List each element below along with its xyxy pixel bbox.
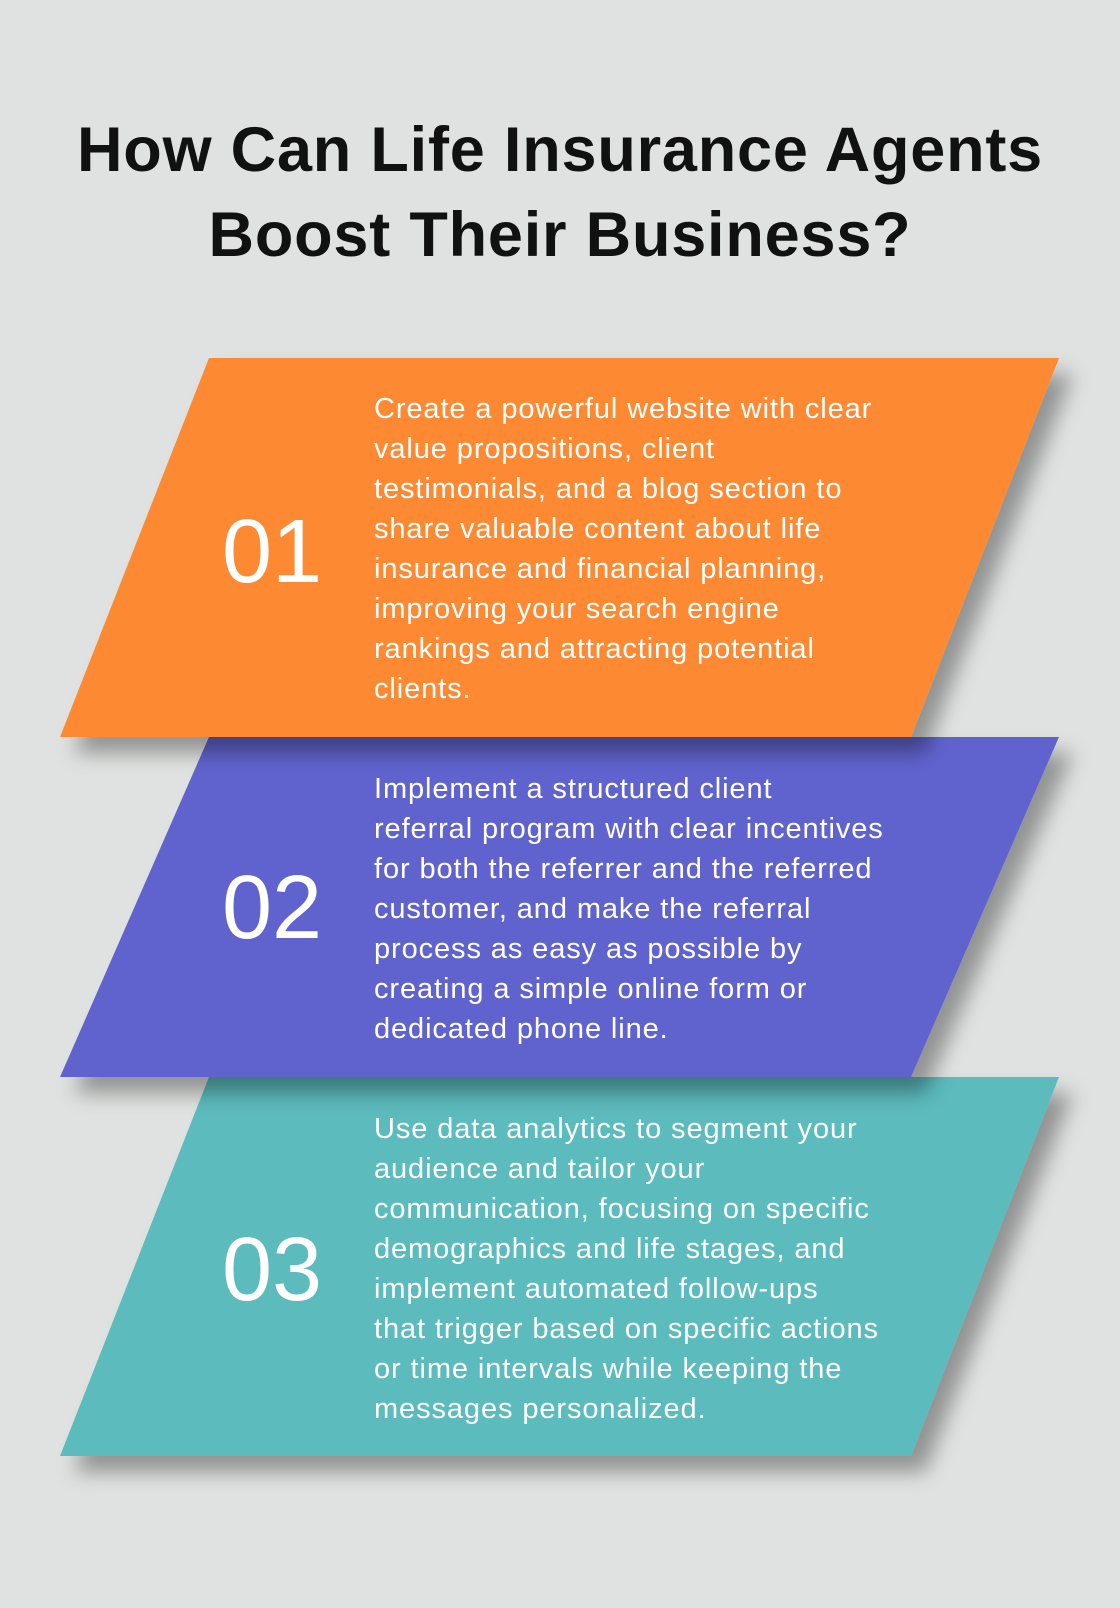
text 03: demographics and life stages, and: [374, 1233, 845, 1265]
text 03: [374, 1113, 879, 1425]
text 01: Create a powerful website with clear: [374, 393, 872, 425]
text 03: audience and tailor your: [374, 1153, 705, 1185]
text 01: [374, 393, 872, 705]
text 03: Use data analytics to segment your: [374, 1113, 858, 1145]
panel 03 shape: [60, 1077, 1059, 1456]
text 03: communication, focusing on specific: [374, 1193, 870, 1225]
title: [77, 115, 1043, 270]
text 01: rankings and attracting potential: [374, 633, 815, 665]
text 02: Implement a structured client: [374, 773, 772, 805]
number 03: 03: [222, 1220, 322, 1320]
text 02: customer, and make the referral: [374, 893, 811, 925]
title: Boost Their Business?: [209, 200, 911, 270]
text 01: insurance and financial planning,: [374, 553, 826, 585]
title: How Can Life Insurance Agents: [77, 115, 1043, 185]
text 03: or time intervals while keeping the: [374, 1353, 842, 1385]
panel 02 shape: [60, 737, 1059, 1077]
text 02: creating a simple online form or: [374, 973, 807, 1005]
text 02: process as easy as possible by: [374, 933, 802, 965]
number 02: 02: [222, 858, 322, 958]
text 02: for both the referrer and the referred: [374, 853, 872, 885]
panel 01 shape: [60, 358, 1059, 737]
text 03: that trigger based on specific actions: [374, 1313, 879, 1345]
text 01: improving your search engine: [374, 593, 780, 625]
text 02: [374, 773, 884, 1045]
text 01: share valuable content about life: [374, 513, 821, 545]
text 03: implement automated follow-ups: [374, 1273, 818, 1305]
number 01: 01: [222, 502, 322, 602]
text 01: testimonials, and a blog section to: [374, 473, 842, 505]
text 03: messages personalized.: [374, 1393, 707, 1425]
text 01: value propositions, client: [374, 433, 715, 465]
text 02: dedicated phone line.: [374, 1013, 669, 1045]
text 02: referral program with clear incentives: [374, 813, 884, 845]
text 01: clients.: [374, 673, 471, 705]
